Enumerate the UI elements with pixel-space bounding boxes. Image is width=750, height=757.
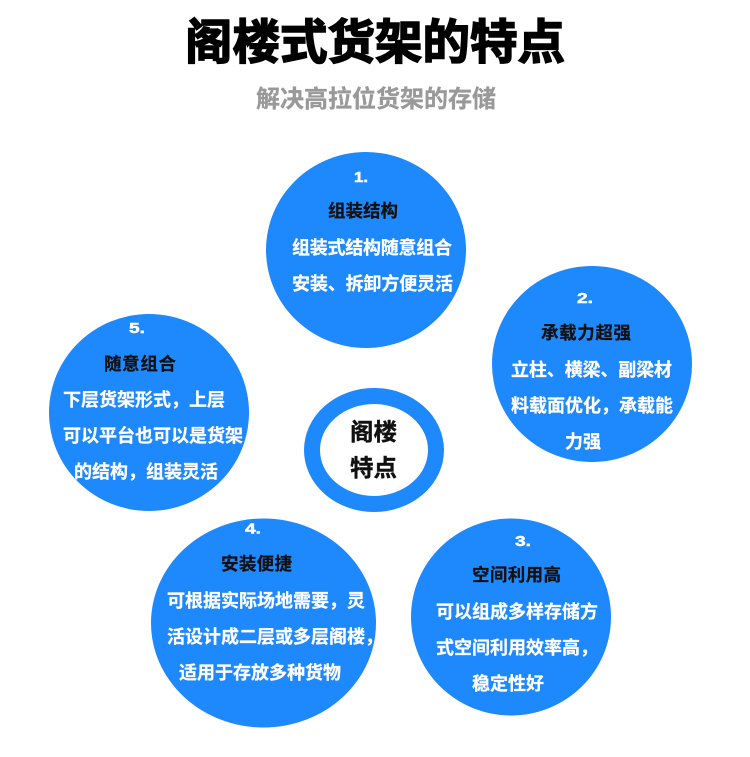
panel: 1 组装结构: 1. [354,169,368,186]
text: 空间利用高 description [436,601,598,694]
panel: center ring [312,396,436,504]
text: 阁楼 特点: 阁楼 [350,419,397,445]
text: 承载力超强 description: 立柱、横梁、副梁材 [511,359,672,380]
heading: 承载力超强: 承载力超强 [541,323,632,343]
text: 阁楼 特点: 特点 [350,455,397,481]
title: 阁楼式货架的特点 [185,17,565,70]
text: 空间利用高 description: 式空间利用效率高， [436,637,598,658]
panel: 4 安装便捷 [151,518,383,728]
text: 空间利用高 description: 可以组成多样存储方 [436,601,598,622]
heading: 空间利用高: 空间利用高 [472,565,561,585]
text: 安装便捷 description [167,590,383,683]
text: 承载力超强 description: 力强 [565,432,601,452]
text: 空间利用高 description: 稳定性好 [472,673,544,694]
heading: 组装结构: 组装结构 [328,201,398,221]
panel: 3 空间利用高: 3. [515,533,531,550]
panel: 5 随意组合 [49,314,249,511]
text: 安装便捷 description: 可根据实际场地需要，灵 [167,590,365,611]
text: 安装便捷 description: 活设计成二层或多层阁楼， [167,626,383,647]
text: 组装结构 description: 安装、拆卸方便灵活 [292,273,453,294]
text: 随意组合 description: 可以平台也可以是货架 [63,425,243,446]
panel: 4 安装便捷: 4. [245,520,261,538]
text: 阁楼 特点 [350,419,397,481]
panel: 2 承载力超强 [492,266,692,462]
panel: 3 空间利用高 [411,518,611,716]
text: 随意组合 description: 下层货架形式，上层 [63,389,225,410]
text: 安装便捷 description: 适用于存放多种货物 [179,662,341,683]
text: 组装结构 description: 组装式结构随意组合 [292,237,452,258]
heading: 随意组合: 随意组合 [104,354,176,374]
subtitle: 解决高拉位货架的存储 [256,85,496,113]
text: 组装结构 description [292,237,453,294]
panel: 5 随意组合: 5. [129,320,145,337]
text: 承载力超强 description [511,359,673,452]
panel: 1 组装结构 [266,152,466,348]
panel: 2 承载力超强: 2. [577,290,593,307]
text: 随意组合 description [63,389,243,482]
heading: 安装便捷: 安装便捷 [221,554,292,574]
text: 随意组合 description: 的结构，组装灵活 [74,462,218,482]
text: 承载力超强 description: 料载面优化，承载能 [511,395,673,416]
